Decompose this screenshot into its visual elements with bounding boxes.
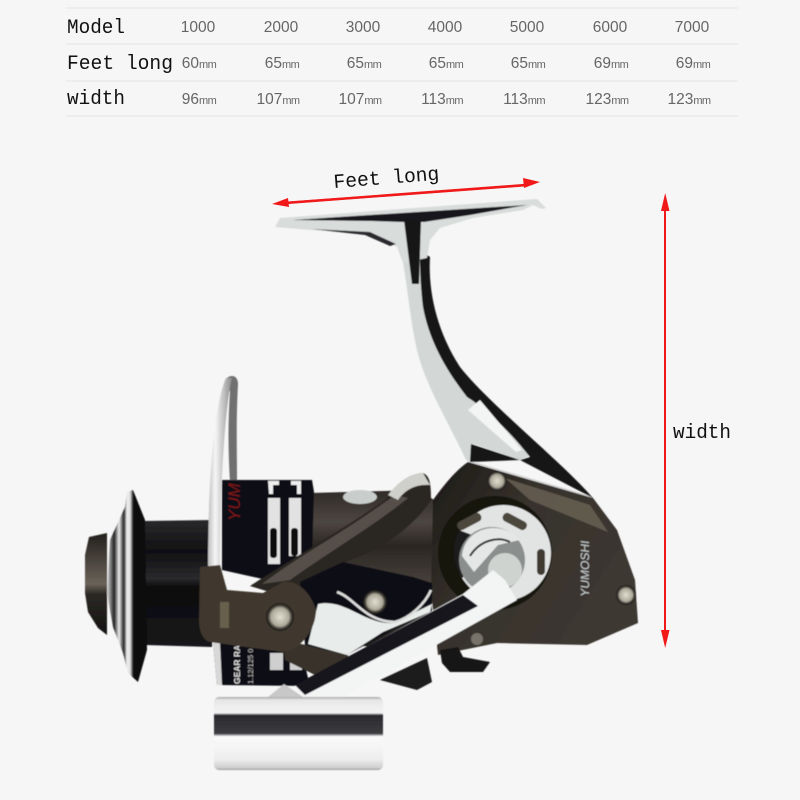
row: Feet long: 69mm — [594, 55, 629, 72]
row: Model — [67, 17, 710, 40]
row: Feet long — [67, 53, 711, 76]
mount highlight — [220, 602, 229, 628]
row: Feet long: 60mm — [182, 55, 217, 72]
bail wire front strand — [208, 378, 232, 566]
housing behind rotor — [310, 490, 434, 650]
row: width: 107mm — [338, 91, 382, 108]
row: Model: 3000 — [346, 19, 381, 36]
small screw — [471, 633, 483, 645]
table row rules — [66, 8, 738, 116]
row: Model: Model — [67, 17, 125, 40]
brand on body: YUMOSHI — [578, 540, 592, 597]
reel foot bar — [275, 199, 546, 263]
left underside shadow — [312, 229, 396, 246]
row: width: 123mm — [585, 91, 629, 108]
bail wire back strand — [227, 376, 238, 482]
width label: width — [673, 422, 731, 445]
cam plate screw — [363, 590, 387, 614]
lower rotor with gear ratio label: GEAR RATIO: — [232, 628, 242, 684]
row: Feet long: 65mm — [429, 55, 464, 72]
body rim line — [468, 461, 592, 497]
stem dark edge — [420, 250, 593, 498]
rotor arm — [250, 473, 431, 600]
handle grip — [214, 697, 383, 770]
row: width: width — [67, 88, 125, 111]
spec table — [66, 8, 738, 116]
feet long arrow — [272, 178, 540, 207]
rotor cup — [222, 480, 314, 585]
row: width: 96mm — [182, 91, 217, 108]
rotor wheel chrome — [438, 496, 552, 610]
lower rotor with gear ratio label: 1.12/125 0. — [246, 646, 255, 684]
row: width: 113mm — [503, 91, 545, 108]
edge screw — [616, 585, 636, 605]
spool knob — [85, 533, 107, 635]
row: Model: 2000 — [264, 19, 299, 36]
row: width — [67, 88, 711, 111]
row: Feet long: Feet long — [67, 53, 173, 76]
row: Model: 4000 — [428, 19, 463, 36]
row: Model: 7000 — [675, 19, 710, 36]
row: Feet long: 69mm — [676, 55, 711, 72]
lower rotor strut — [283, 640, 350, 680]
lower stem shadow — [470, 444, 520, 462]
row: Model: 6000 — [593, 19, 628, 36]
medallion — [343, 490, 377, 504]
width arrow — [661, 193, 670, 648]
row: width: 123mm — [667, 91, 711, 108]
bail mount screw — [266, 603, 294, 631]
row: width: 113mm — [421, 91, 463, 108]
body highlight — [505, 478, 608, 532]
lower stem highlight — [468, 400, 522, 452]
rotor brand mark: YUM — [225, 482, 244, 521]
top screw — [487, 471, 507, 491]
handle arm — [295, 570, 517, 697]
fishing reel illustration — [85, 199, 638, 770]
handle dark face — [295, 595, 478, 695]
anti-reverse lever — [380, 658, 432, 690]
feet long label: Feet long — [333, 164, 440, 195]
rotor silver slots — [268, 481, 301, 564]
spool line — [143, 520, 212, 647]
row: Model: 1000 — [181, 19, 216, 36]
reel foot dark line — [293, 205, 527, 222]
row: Feet long: 65mm — [347, 55, 382, 72]
foot neck shadow — [404, 220, 421, 284]
gearbox body — [431, 462, 638, 655]
spool flange — [107, 490, 147, 682]
reel foot stem chrome — [403, 250, 530, 462]
chrome cam plate — [300, 562, 432, 655]
folding latch — [440, 647, 490, 672]
handle base chrome — [268, 684, 303, 697]
bail arm mount — [199, 565, 316, 652]
row: Model: 5000 — [510, 19, 545, 36]
rotor arm chrome rim — [388, 473, 430, 500]
rotor arm olive band — [262, 495, 408, 584]
lower rotor with gear ratio label — [213, 628, 310, 686]
row: width: 107mm — [256, 91, 300, 108]
row: Feet long: 65mm — [265, 55, 300, 72]
row: Feet long: 65mm — [511, 55, 546, 72]
